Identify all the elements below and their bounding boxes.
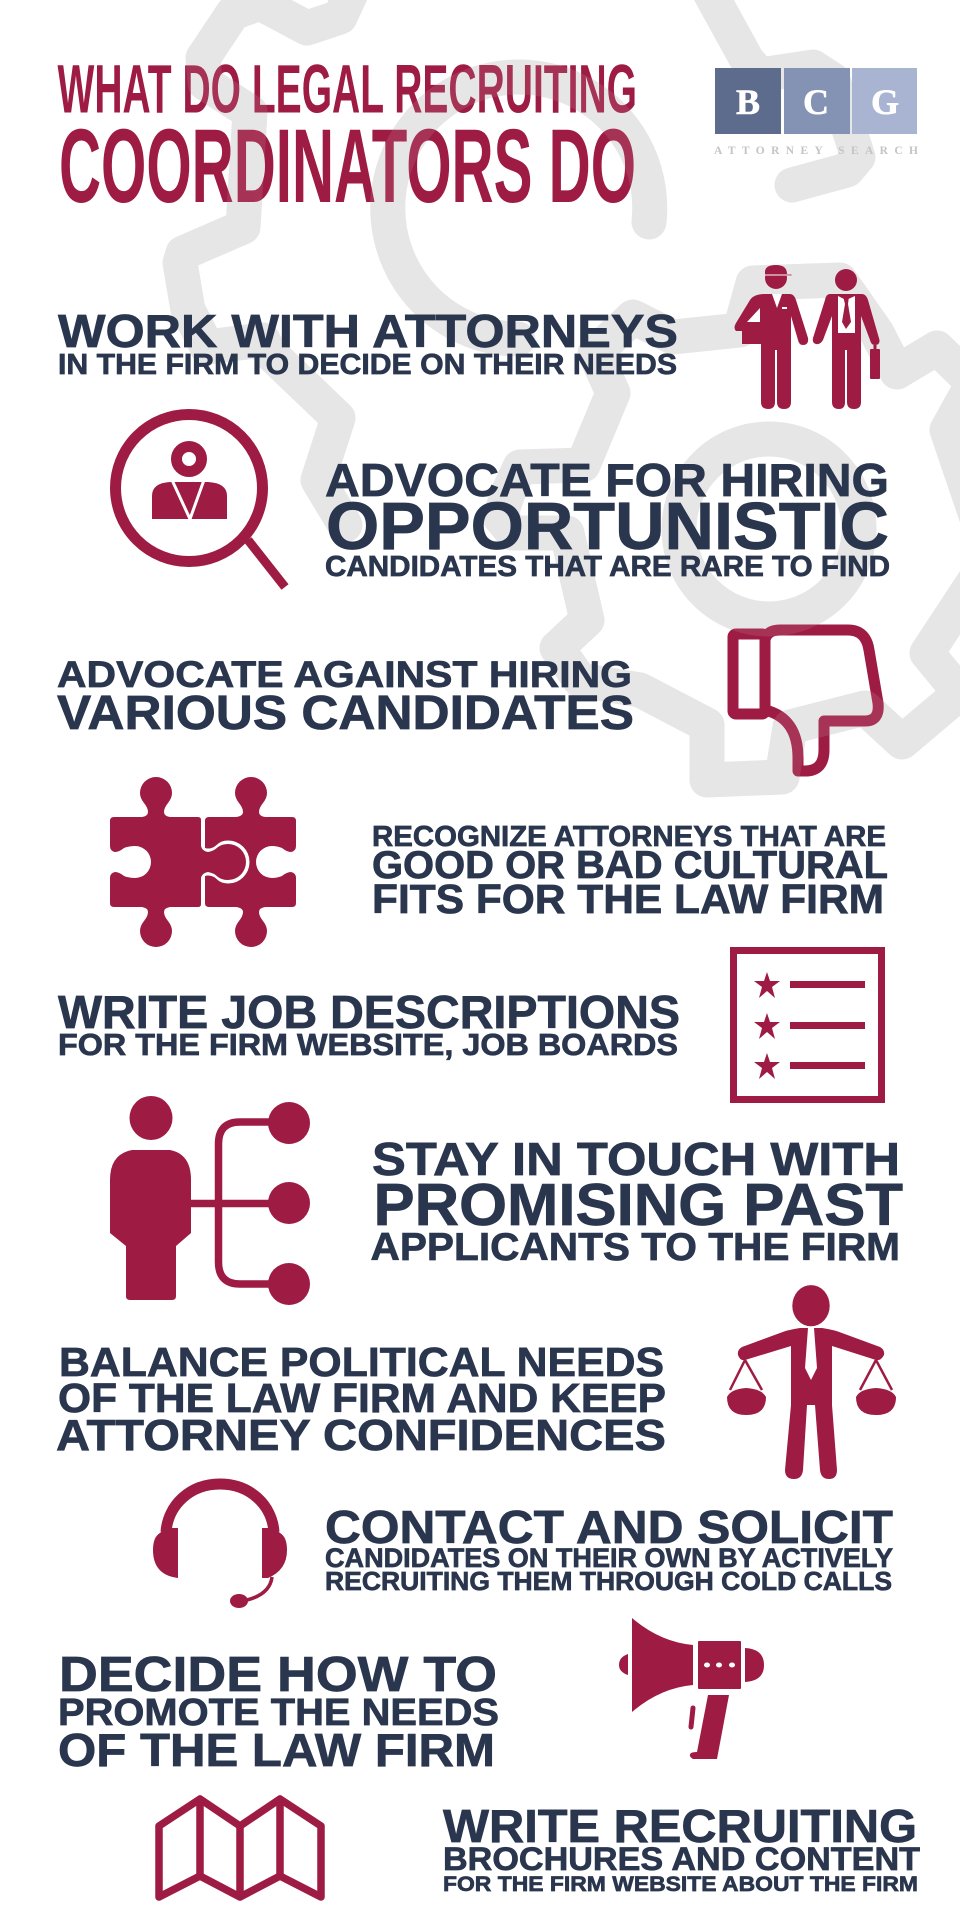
text: work with attorneys: WORK WITH ATTORNEYS xyxy=(58,305,678,357)
icon: magnifier with candidate xyxy=(116,414,285,587)
logo: BCG Attorney Search xyxy=(714,68,918,157)
text: contact and solicit: CONTACT AND SOLICIT xyxy=(325,1501,893,1553)
text: write recruiting brochures: FOR THE FIRM WEBSITE ABOUT THE FIRM xyxy=(443,1871,918,1896)
text: balance political needs: OF THE LAW FIRM AND KEEP xyxy=(58,1375,666,1421)
text: decide how to promote: PROMOTE THE NEEDS xyxy=(58,1691,499,1733)
text: decide how to promote: OF THE LAW FIRM xyxy=(58,1724,495,1776)
logo: BCG Attorney Search: G xyxy=(871,82,899,122)
text: advocate for hiring: ADVOCATE FOR HIRING xyxy=(325,454,889,506)
icon: headset xyxy=(153,1484,287,1608)
text: contact and solicit: CANDIDATES ON THEIR OWN BY ACTIVELY xyxy=(325,1543,893,1573)
text: write job descriptions: WRITE JOB DESCRIPTIONS xyxy=(58,986,680,1038)
icon: folded map xyxy=(159,1799,321,1897)
text: stay in touch: APPLICANTS TO THE FIRM xyxy=(370,1226,900,1269)
text: advocate against: ADVOCATE AGAINST HIRING xyxy=(57,654,632,695)
logo: BCG Attorney Search: B xyxy=(736,82,760,122)
text: recognize attorneys xyxy=(372,821,888,922)
text: contact and solicit xyxy=(325,1501,893,1596)
text: write recruiting brochures xyxy=(443,1800,920,1896)
text: decide how to promote xyxy=(58,1648,499,1776)
text: stay in touch: STAY IN TOUCH WITH xyxy=(372,1133,900,1185)
text: advocate for hiring xyxy=(325,454,890,583)
text: advocate for hiring: OPPORTUNISTIC xyxy=(326,490,889,564)
text: stay in touch: PROMISING PAST xyxy=(374,1171,903,1238)
text: stay in touch xyxy=(370,1133,903,1269)
text: contact and solicit: RECRUITING THEM THROUGH COLD CALLS xyxy=(325,1566,892,1596)
icon: man balancing scales xyxy=(727,1285,896,1479)
text: write recruiting brochures: WRITE RECRUITING xyxy=(443,1800,917,1852)
text: write job descriptions: FOR THE FIRM WEBSITE, JOB BOARDS xyxy=(58,1028,678,1062)
text: advocate against xyxy=(57,654,634,740)
text: advocate against: VARIOUS CANDIDATES xyxy=(57,687,634,740)
icon: thumbs down xyxy=(733,630,878,771)
icon: megaphone xyxy=(619,1618,764,1759)
text: decide how to promote: DECIDE HOW TO xyxy=(59,1648,497,1702)
text: balance political needs: BALANCE POLITICAL NEEDS xyxy=(59,1339,664,1385)
text: balance political needs: ATTORNEY CONFIDENCES xyxy=(56,1412,666,1460)
text: recognize attorneys: RECOGNIZE ATTORNEYS THAT ARE xyxy=(372,821,886,853)
logo: BCG Attorney Search: ATTORNEY SEARCH xyxy=(714,145,918,157)
title xyxy=(58,51,637,225)
text: work with attorneys: IN THE FIRM TO DECIDE ON THEIR NEEDS xyxy=(58,349,677,381)
text: recognize attorneys: FITS FOR THE LAW FIRM xyxy=(372,876,884,922)
icon: two attorneys xyxy=(734,265,880,409)
text: work with attorneys xyxy=(58,305,678,381)
icon: job description list xyxy=(734,950,882,1100)
text: write job descriptions xyxy=(58,986,680,1062)
text: write recruiting brochures: BROCHURES AND CONTENT xyxy=(443,1841,920,1877)
text: recognize attorneys: GOOD OR BAD CULTURAL xyxy=(372,844,888,887)
icon: puzzle pieces xyxy=(110,777,296,947)
icon: person with network xyxy=(110,1096,310,1305)
logo: BCG Attorney Search: C xyxy=(803,82,829,122)
text: advocate for hiring: CANDIDATES THAT ARE RARE TO FIND xyxy=(325,551,890,583)
text: balance political needs xyxy=(56,1339,666,1460)
